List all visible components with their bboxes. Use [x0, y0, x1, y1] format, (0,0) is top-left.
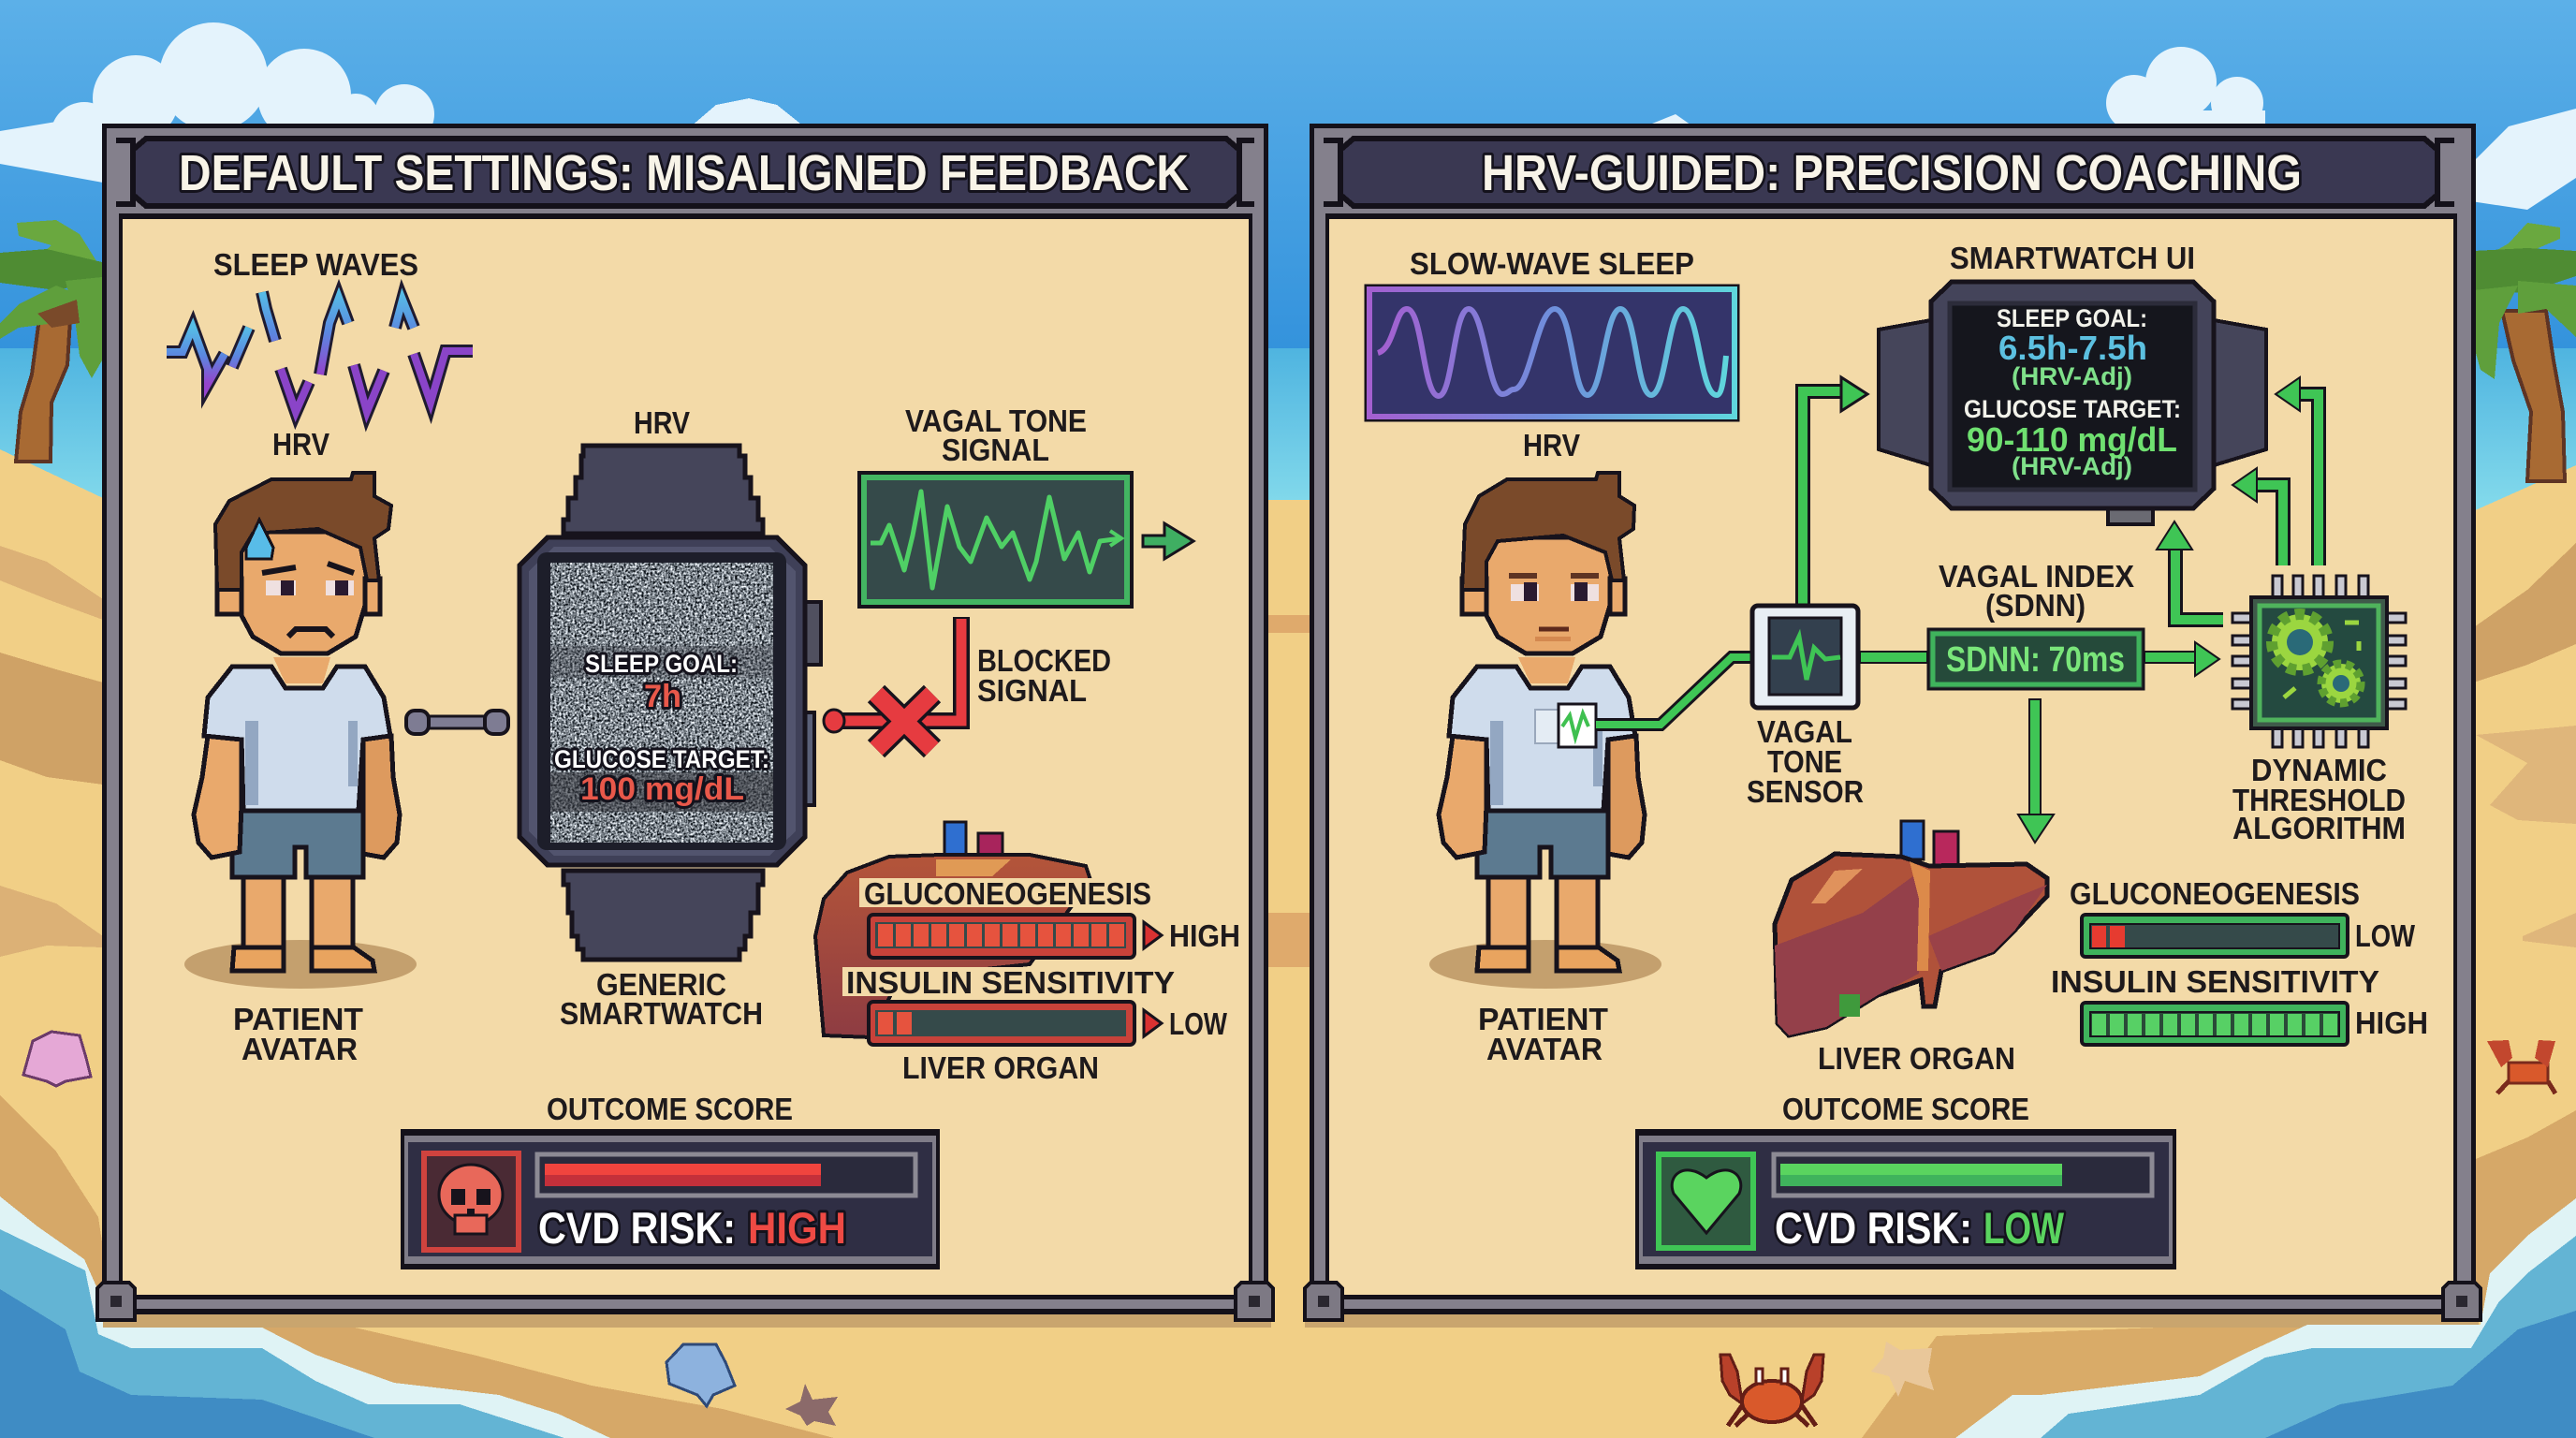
label: vagal tone signal: VAGAL TONE [905, 404, 1087, 438]
label: outcome score: OUTCOME SCORE [1782, 1092, 2029, 1126]
arrow: blocked signal line [824, 617, 961, 749]
label: insulin sensitivity: INSULIN SENSITIVITY [2051, 964, 2379, 999]
label: vagal index sdnn: (SDNN) [1985, 588, 2086, 623]
icon: heart [1659, 1154, 1753, 1248]
label: vagal tone sensor [1747, 714, 1864, 809]
connector: avatar to watch [406, 711, 508, 734]
screen text: (HRV-Adj) [2012, 452, 2132, 480]
label: blocked signal: SIGNAL [977, 673, 1087, 708]
panel frame [1305, 124, 2481, 1320]
screen text: 100 mg/dL [580, 771, 744, 807]
panel: cvd risk high score [401, 1129, 940, 1269]
label: low: LOW [1169, 1006, 1228, 1041]
panel frame [97, 124, 1273, 1320]
label: gluconeogenesis: GLUCONEOGENESIS [2070, 876, 2360, 911]
icon: healthy liver [1775, 821, 2047, 1035]
label: vagal index sdnn: VAGAL INDEX [1939, 559, 2134, 594]
text: cvd risk high: HIGH [748, 1203, 846, 1253]
screen text: SLEEP GOAL: [1997, 304, 2147, 332]
label: patient avatar: PATIENT [1478, 1002, 1608, 1036]
screen text: 90-110 mg/dL [1967, 420, 2177, 459]
label: patient avatar [1478, 1002, 1608, 1066]
vagal tone sensor [1752, 606, 1858, 708]
label: vagal index sdnn [1939, 559, 2134, 623]
label: liver organ: LIVER ORGAN [902, 1050, 1099, 1085]
panel: cvd risk low score [1635, 1129, 2176, 1269]
label: high: HIGH [1169, 918, 1240, 953]
label: slow-wave sleep: SLOW-WAVE SLEEP [1410, 246, 1694, 281]
icon: beige starfish [1871, 1342, 1934, 1397]
label: hrv above watch: HRV [634, 405, 690, 440]
readout: sdnn value [1928, 629, 2144, 689]
screen text: (HRV-Adj) [2012, 362, 2132, 390]
label: hrv above avatar: HRV [272, 427, 329, 462]
chart: fragmented sleep waves [167, 292, 473, 412]
gauge: insulin sensitivity high [2082, 1003, 2348, 1045]
text: cvd risk high: CVD RISK: [538, 1203, 736, 1253]
arrow: high marker [1144, 922, 1162, 948]
label: hrv above avatar: HRV [1523, 428, 1580, 462]
character: stressed patient avatar [184, 473, 417, 989]
label: vagal tone signal [905, 404, 1087, 467]
arrow: chest sensor to vagal sensor [1596, 657, 1752, 725]
connector: sensor to index [1860, 652, 1927, 663]
icon: algorithm chip [2232, 576, 2406, 747]
screen text [1964, 304, 2181, 480]
heading: DEFAULT SETTINGS: MISALIGNED FEEDBACK [179, 145, 1189, 201]
screen text: SLEEP GOAL: [585, 650, 738, 678]
label: dynamic threshold algorithm: THRESHOLD [2232, 783, 2406, 817]
label: high: HIGH [2355, 1005, 2428, 1040]
readout: sdnn value: SDNN: 70ms [1946, 640, 2125, 680]
icon: blue shell [666, 1344, 735, 1406]
icon: brown starfish [785, 1384, 838, 1426]
label: low: LOW [2355, 918, 2416, 953]
arrow: low marker [1144, 1010, 1162, 1036]
icon: sweat drop [246, 520, 273, 559]
arrow: sensor up to smartwatch [1803, 377, 1867, 607]
screen text: 6.5h-7.5h [1998, 329, 2147, 367]
arrow: algorithm to watch short [2157, 521, 2223, 620]
palm tree right [2474, 223, 2576, 481]
text: cvd risk low: CVD RISK: [1775, 1203, 1972, 1253]
label: dynamic threshold algorithm: DYNAMIC [2251, 753, 2387, 787]
panel: default settings misaligned feedback [97, 124, 1273, 1320]
arrow: index to algorithm [2144, 642, 2219, 676]
label: blocked signal [977, 643, 1111, 708]
generic smartwatch with static screen [520, 446, 821, 960]
label: vagal tone sensor: VAGAL [1757, 714, 1852, 749]
gauge: gluconeogenesis high [869, 915, 1134, 958]
label: vagal tone signal: SIGNAL [942, 433, 1049, 467]
screen text: GLUCOSE TARGET: [1964, 395, 2181, 423]
label: sleep waves: SLEEP WAVES [213, 247, 418, 282]
screen text: 7h [644, 679, 681, 714]
progress bar: low risk [1774, 1154, 2152, 1196]
label: patient avatar: AVATAR [242, 1032, 358, 1066]
screen text: GLUCOSE TARGET: [554, 745, 769, 773]
icon: red x [876, 694, 932, 749]
screen text [554, 650, 769, 807]
palm tree left [0, 220, 103, 462]
arrow: algorithm to watch long [2276, 377, 2319, 565]
label: liver organ: LIVER ORGAN [1818, 1041, 2015, 1076]
label: dynamic threshold algorithm: ALGORITHM [2232, 811, 2406, 845]
label: vagal tone sensor: TONE [1767, 744, 1842, 779]
label: gluconeogenesis: GLUCONEOGENESIS [864, 876, 1151, 911]
label: generic smartwatch: SMARTWATCH [560, 996, 763, 1031]
gauge: gluconeogenesis low [2082, 915, 2348, 957]
arrow: signal out [1143, 523, 1193, 559]
chart: vagal tone signal monitor [859, 473, 1132, 607]
arrow: algorithm to watch middle [2232, 468, 2283, 565]
character: healthy patient avatar [1429, 473, 1661, 989]
panel: hrv-guided precision coaching [1305, 124, 2481, 1320]
clouds [0, 22, 2576, 210]
label: patient avatar [233, 1002, 363, 1066]
label: patient avatar: AVATAR [1486, 1032, 1603, 1066]
label: outcome score: OUTCOME SCORE [547, 1092, 793, 1126]
icon: pink shell [23, 1032, 91, 1086]
label: vagal tone sensor: SENSOR [1747, 774, 1864, 809]
arrow: index down to liver [2018, 699, 2054, 843]
heading: HRV-GUIDED: PRECISION COACHING [1482, 145, 2302, 201]
progress bar: high risk [537, 1154, 915, 1196]
label: insulin sensitivity: INSULIN SENSITIVITY [846, 965, 1175, 1000]
icon: skull [424, 1153, 519, 1250]
icon: crab bottom [1720, 1355, 1823, 1426]
screen static noise [550, 563, 773, 843]
icon: chest sensor [1535, 704, 1596, 747]
label: blocked signal: BLOCKED [977, 643, 1111, 678]
smartwatch ui [1879, 282, 2266, 524]
chart: slow-wave sleep monitor [1366, 286, 1738, 420]
label: patient avatar: PATIENT [233, 1002, 363, 1036]
label: generic smartwatch: GENERIC [596, 967, 726, 1002]
icon: crab right [2487, 1040, 2555, 1093]
label: dynamic threshold algorithm [2232, 753, 2406, 845]
label: smartwatch ui: SMARTWATCH UI [1950, 241, 2195, 275]
gauge: insulin sensitivity low [869, 1002, 1134, 1045]
label: generic smartwatch [560, 967, 763, 1031]
icon: liver behind gauges [815, 822, 1090, 1037]
text: cvd risk low: LOW [1983, 1203, 2064, 1253]
